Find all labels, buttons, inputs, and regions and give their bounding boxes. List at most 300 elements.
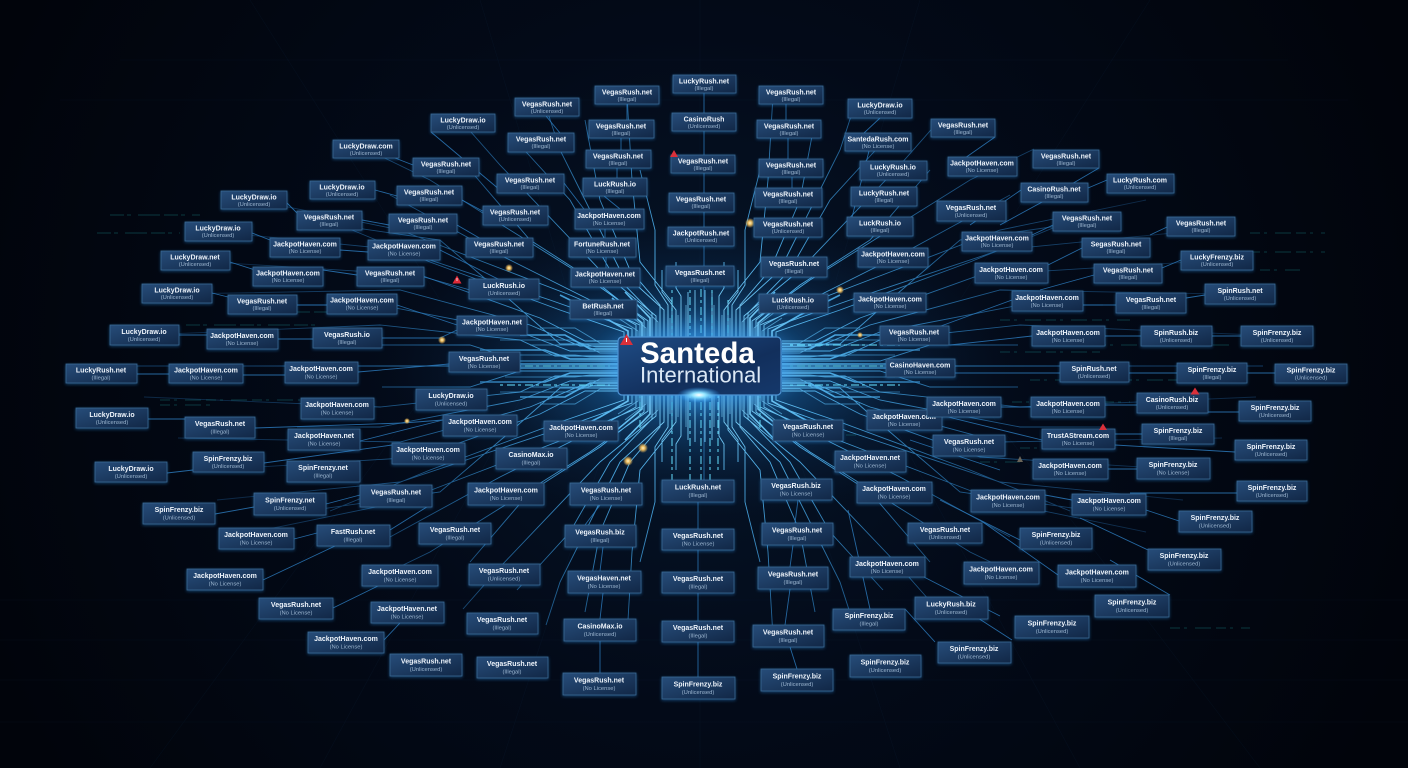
- node LuckyDraw.io: LuckyDraw.io: [857, 102, 903, 110]
- node LuckyDraw.net: [161, 251, 230, 270]
- node VegasRush.net: [595, 86, 659, 104]
- node VegasRush.net: [773, 420, 843, 441]
- node VegasRush.net: (Illegal): [608, 161, 628, 167]
- node JackpotHaven.com: JackpotHaven.com: [858, 296, 922, 304]
- node JackpotHaven.com: JackpotHaven.com: [256, 270, 320, 278]
- node VegasRush.net: [662, 621, 734, 642]
- node JackpotHaven.com: (No License): [995, 275, 1027, 281]
- node VegasRush.biz: [565, 525, 636, 547]
- node VegasRush.net: VegasRush.net: [946, 205, 997, 212]
- node SpinFrenzy.biz: (Illegal): [859, 622, 879, 628]
- node JackpotHaven.com: [207, 329, 278, 349]
- node VegasRush.net: VegasRush.net: [766, 162, 817, 170]
- node VegasRush.net: VegasRush.net: [490, 210, 541, 216]
- node VegasRush.net: VegasRush.net: [938, 122, 989, 130]
- node SpinFrenzy.biz: SpinFrenzy.biz: [1028, 620, 1077, 628]
- node CasinoHaven.com: (No License): [904, 370, 936, 376]
- node SpinFrenzy.biz: SpinFrenzy.biz: [950, 646, 999, 653]
- node VegasRush.net: (No License): [682, 542, 714, 548]
- node LuckyDraw.io: (Unlicensed): [115, 474, 147, 480]
- node VegasRush.net: [1094, 264, 1162, 283]
- node VegasRush.net: [297, 211, 362, 230]
- node JackpotHaven.com: (No License): [878, 494, 910, 500]
- node VegasRush.net: (Illegal): [419, 197, 439, 203]
- node VegasRush.net: (Unlicensed): [499, 217, 531, 223]
- node LuckyDraw.io: LuckyDraw.io: [440, 118, 486, 124]
- node JackpotHaven.com: [964, 562, 1039, 584]
- node JackpotHaven.com: [850, 557, 925, 577]
- node JackpotHaven.com: (No License): [346, 306, 378, 312]
- node VegasRush.net: VegasRush.net: [237, 298, 288, 306]
- node SpinFrenzy.biz: SpinFrenzy.biz: [845, 613, 894, 620]
- node JackpotHaven.com: JackpotHaven.com: [1015, 295, 1079, 302]
- node JackpotHaven.com: (No License): [593, 221, 625, 227]
- data particles: [97, 215, 1325, 628]
- node JackpotHaven.net: JackpotHaven.net: [377, 606, 438, 613]
- node VegasRush.net: VegasRush.net: [763, 630, 814, 636]
- node LuckyDraw.io: [221, 191, 287, 209]
- node VegasRush.net: (Illegal): [319, 222, 339, 228]
- node VegasRush.net: VegasRush.net: [678, 158, 729, 166]
- node VegasRush.net: (Illegal): [787, 536, 807, 542]
- node JackpotHaven.com: [187, 569, 263, 590]
- node VegasRush.net: [662, 572, 734, 593]
- node VegasRush.net: (Illegal): [688, 584, 708, 590]
- node SegasRush.net: (Illegal): [1106, 249, 1126, 255]
- node LuckyRush.net: [851, 187, 917, 206]
- node VegasRush.net: (Illegal): [778, 199, 798, 205]
- node VegasRush.net: [753, 625, 824, 647]
- node SpinFrenzy.biz: SpinFrenzy.biz: [1247, 444, 1296, 451]
- node VegasRush.net: VegasRush.net: [1103, 268, 1154, 274]
- node VegasRush.net: [570, 483, 642, 505]
- node SpinFrenzy.biz: (Unlicensed): [1295, 376, 1327, 382]
- node VegasRush.net: VegasRush.net: [581, 488, 632, 494]
- node SpinFrenzy.biz: SpinFrenzy.biz: [1191, 515, 1240, 522]
- node JackpotHaven.com: (No License): [565, 433, 597, 439]
- node VegasRush.net: VegasRush.net: [673, 625, 724, 632]
- node VegasRush.net: [497, 174, 564, 193]
- node JackpotHaven.com: JackpotHaven.com: [969, 566, 1033, 574]
- node SpinFrenzy.net: SpinFrenzy.net: [265, 498, 315, 504]
- node CasinoRush.net: [1021, 183, 1088, 202]
- node JackpotHaven.com: [854, 293, 926, 312]
- node FastRush.net: [317, 525, 390, 546]
- node VegasRush.net: (No License): [583, 686, 615, 692]
- node VegasRush.biz: VegasRush.biz: [771, 483, 821, 490]
- node VegasRush.net: [1167, 217, 1235, 236]
- node SpinFrenzy.biz: (Unlicensed): [1255, 452, 1287, 458]
- node VegasRush.net: (Illegal): [1141, 305, 1161, 311]
- node SpinFrenzy.biz: (Unlicensed): [1168, 562, 1200, 568]
- node CasinoRush.net: (Illegal): [1044, 194, 1064, 200]
- node VegasRush.net: VegasRush.net: [365, 270, 416, 278]
- node JackpotHaven.com: [867, 410, 942, 430]
- node SpinFrenzy.biz: (Unlicensed): [958, 654, 990, 660]
- node VegasRush.net: VegasRush.net: [593, 154, 644, 160]
- node JackpotRush.net: [668, 227, 734, 246]
- node JackpotHaven.net: JackpotHaven.net: [575, 272, 636, 278]
- node VegasRush.net: (Illegal): [953, 130, 973, 136]
- alert icon: [1190, 388, 1200, 394]
- node SegasRush.net: SegasRush.net: [1091, 242, 1142, 248]
- node SpinFrenzy.biz: [1015, 616, 1089, 638]
- node JackpotHaven.com: JackpotHaven.com: [396, 447, 460, 454]
- node LuckyDraw.io: (Unlicensed): [447, 125, 479, 131]
- node LuckyDraw.io: [416, 389, 487, 410]
- node JackpotHaven.com: JackpotHaven.com: [979, 267, 1043, 274]
- node VegasRush.net: (No License): [468, 364, 500, 370]
- node SpinRush.biz: (Unlicensed): [1160, 338, 1192, 344]
- node JackpotHaven.com: [468, 483, 544, 505]
- node VegasRush.net: VegasRush.net: [944, 439, 995, 446]
- node VegasRush.io: [313, 328, 382, 348]
- node LuckyRush.net: [673, 75, 736, 93]
- node JackpotHaven.com: [971, 490, 1045, 512]
- node LuckyRush.io: (Unlicensed): [877, 172, 909, 178]
- node SpinFrenzy.biz: [1239, 401, 1311, 421]
- node VegasRush.net: (No License): [590, 496, 622, 502]
- node VegasRush.net: (Illegal): [210, 430, 230, 436]
- node JackpotHaven.net: [835, 451, 906, 472]
- node VegasRush.net: (Illegal): [781, 97, 801, 103]
- node SpinFrenzy.biz: [1275, 364, 1347, 383]
- node SpinFrenzy.biz: [662, 677, 735, 699]
- node VegasRush.net: VegasRush.net: [769, 261, 820, 268]
- node FortuneRush.net: [569, 238, 636, 257]
- node LuckyRush.biz: (Unlicensed): [935, 610, 967, 616]
- node JackpotHaven.net: (No License): [476, 327, 508, 333]
- hub glow: [605, 326, 795, 406]
- node JackpotHaven.com: JackpotHaven.com: [305, 402, 369, 409]
- node JackpotHaven.com: JackpotHaven.com: [289, 366, 353, 373]
- node SpinFrenzy.biz: SpinFrenzy.biz: [1154, 428, 1203, 435]
- node SpinFrenzy.net: SpinFrenzy.net: [298, 465, 348, 472]
- node JackpotHaven.com: [327, 294, 397, 314]
- node BetRush.net: [570, 300, 637, 319]
- node JackpotHaven.com: [1012, 291, 1083, 311]
- node JackpotHaven.com: (No License): [384, 578, 416, 584]
- node VegasRush.net: VegasRush.net: [772, 528, 823, 534]
- node VegasRush.net: (Unlicensed): [929, 535, 961, 541]
- node LuckyRush.net: (Illegal): [91, 376, 111, 382]
- node VegasRush.net: VegasRush.net: [673, 533, 724, 540]
- node SpinRush.biz: [1141, 326, 1212, 346]
- node VegasRush.net: [931, 119, 995, 137]
- node JackpotHaven.com: (No License): [272, 278, 304, 284]
- node JackpotHaven.net: (No License): [589, 279, 621, 285]
- node JackpotHaven.com: (No License): [877, 259, 909, 265]
- node LuckyDraw.io: [95, 462, 167, 482]
- circuit traces: [137, 95, 1263, 637]
- node VegasRush.net: VegasRush.net: [522, 102, 573, 108]
- node SpinFrenzy.biz: (Unlicensed): [1256, 493, 1288, 499]
- node VegasRush.net: (No License): [953, 448, 985, 454]
- node VegasRush.net: [357, 267, 424, 286]
- node JackpotHaven.com: JackpotHaven.com: [872, 414, 936, 421]
- node SpinFrenzy.biz: SpinFrenzy.biz: [155, 507, 204, 514]
- node VegasRush.net: VegasRush.net: [477, 617, 528, 624]
- node SpinRush.net: (Unlicensed): [1224, 296, 1256, 302]
- node CasinoHaven.com: CasinoHaven.com: [890, 362, 950, 370]
- node JackpotHaven.com: (No License): [464, 428, 496, 434]
- node JackpotHaven.net: (No License): [391, 614, 423, 620]
- node JackpotHaven.com: [362, 565, 438, 586]
- node VegasRush.net: [757, 120, 821, 138]
- node JackpotHaven.com: [270, 238, 340, 257]
- node LuckyDraw.io: LuckyDraw.io: [89, 412, 135, 419]
- node SantedaRush.com: (No License): [862, 144, 894, 150]
- node SpinFrenzy.biz: SpinFrenzy.biz: [204, 456, 253, 463]
- node JackpotHaven.com: (No License): [874, 304, 906, 310]
- node VegasRush.net: [937, 201, 1006, 221]
- node SpinFrenzy.biz: [938, 642, 1011, 663]
- node JackpotHaven.com: JackpotHaven.com: [862, 486, 926, 493]
- node JackpotHaven.com: [1032, 326, 1105, 346]
- node LuckRush.io: [847, 217, 913, 236]
- node LuckyDraw.io: [310, 181, 375, 199]
- node JackpotHaven.com: (No License): [289, 249, 321, 255]
- node VegasRush.net: [755, 188, 822, 207]
- node JackpotHaven.com: JackpotHaven.com: [448, 419, 512, 426]
- node VegasRush.biz: [761, 479, 832, 500]
- node LuckyRush.com: (Unlicensed): [1124, 185, 1156, 191]
- node CasinoRush.biz: CasinoRush.biz: [1146, 397, 1199, 404]
- node SpinFrenzy.biz: (Unlicensed): [1036, 629, 1068, 635]
- node VegasRush.net: [508, 133, 574, 152]
- node JackpotHaven.net: [288, 429, 360, 450]
- node JackpotHaven.com: (No License): [948, 409, 980, 415]
- node VegasRush.net: (Illegal): [779, 131, 799, 137]
- node JackpotHaven.net: [571, 268, 640, 287]
- node VegasRush.net: (Unlicensed): [488, 576, 520, 582]
- node JackpotHaven.com: JackpotHaven.com: [549, 425, 613, 432]
- node JackpotHaven.com: [368, 240, 440, 260]
- node JackpotHaven.net: JackpotHaven.net: [840, 455, 901, 462]
- node JackpotHaven.com: JackpotHaven.com: [577, 213, 641, 220]
- node VegasRush.net: [469, 564, 540, 585]
- node CasinoMax.io: [564, 619, 636, 641]
- node SantedaRush.com: SantedaRush.com: [847, 136, 909, 144]
- node VegasRush.net: (Illegal): [1056, 161, 1076, 167]
- node JackpotHaven.com: [1033, 459, 1108, 479]
- node LuckyDraw.net: LuckyDraw.net: [170, 254, 220, 262]
- node JackpotHaven.com: [392, 443, 465, 464]
- node LuckRush.net: (Illegal): [688, 493, 708, 499]
- node LuckyDraw.io: [110, 325, 179, 345]
- node JackpotHaven.com: [544, 421, 618, 441]
- node VegasRush.biz: VegasRush.biz: [575, 530, 625, 536]
- node SpinFrenzy.biz: SpinFrenzy.biz: [1253, 330, 1302, 337]
- node VegasRush.io: (Illegal): [337, 340, 357, 346]
- node SpinFrenzy.biz: SpinFrenzy.biz: [1032, 532, 1081, 539]
- node VegasRush.net: [1116, 293, 1186, 313]
- node JackpotHaven.com: (No License): [966, 168, 998, 174]
- node VegasRush.net: [758, 567, 828, 589]
- node JackpotHaven.com: [962, 232, 1032, 251]
- node LuckyDraw.com: (Unlicensed): [350, 151, 382, 157]
- node JackpotHaven.com: [948, 157, 1017, 176]
- node SpinFrenzy.biz: SpinFrenzy.biz: [1251, 405, 1300, 412]
- node VegasHaven.net: (No License): [588, 584, 620, 590]
- node VegasRush.io: VegasRush.io: [324, 332, 370, 339]
- node JackpotHaven.com: JackpotHaven.com: [174, 368, 238, 374]
- node SpinFrenzy.biz: [1142, 424, 1214, 444]
- node LuckyDraw.io: LuckyDraw.io: [428, 393, 474, 400]
- node JackpotHaven.com: JackpotHaven.com: [368, 569, 432, 576]
- node VegasRush.net: [259, 598, 333, 619]
- node SpinFrenzy.net: (Illegal): [313, 474, 333, 480]
- node VegasRush.net: [759, 159, 823, 177]
- node SpinFrenzy.biz: (Unlicensed): [1116, 608, 1148, 614]
- node VegasRush.net: VegasRush.net: [596, 124, 647, 130]
- node JackpotHaven.com: JackpotHaven.com: [210, 333, 274, 340]
- node CasinoRush.biz: (Unlicensed): [1156, 405, 1188, 411]
- node SpinFrenzy.biz: [761, 669, 833, 691]
- node VegasRush.net: (Illegal): [502, 670, 522, 676]
- node JackpotHaven.com: [857, 482, 932, 503]
- node CasinoMax.io: (Unlicensed): [584, 632, 616, 638]
- node JackpotHaven.com: JackpotHaven.com: [1036, 401, 1100, 408]
- node VegasRush.net: (Illegal): [252, 306, 272, 312]
- node VegasRush.net: [228, 295, 297, 314]
- node JackpotHaven.com: (No License): [1081, 578, 1113, 584]
- node CasinoMax.io: (Illegal): [521, 460, 541, 466]
- node LuckyDraw.io: LuckyDraw.io: [108, 466, 154, 473]
- node JackpotHaven.com: (No License): [209, 582, 241, 588]
- node SpinFrenzy.biz: (Illegal): [1168, 436, 1188, 442]
- node JackpotHaven.com: JackpotHaven.com: [1077, 498, 1141, 505]
- node VegasRush.net: (Illegal): [1077, 223, 1097, 229]
- node JackpotHaven.net: [371, 602, 444, 623]
- node LuckyDraw.io: (Unlicensed): [161, 295, 193, 301]
- node SpinFrenzy.biz: [1179, 511, 1252, 532]
- node VegasRush.net: VegasRush.net: [516, 136, 567, 144]
- node SpinFrenzy.biz: SpinFrenzy.biz: [861, 660, 910, 666]
- node JackpotHaven.com: JackpotHaven.com: [1036, 330, 1100, 337]
- node SpinRush.net: [1205, 284, 1275, 304]
- node VegasRush.net: (Illegal): [693, 166, 713, 172]
- node SpinRush.net: [1060, 362, 1129, 382]
- node LuckyRush.net: (Illegal): [874, 198, 894, 204]
- node VegasRush.net: (Illegal): [380, 278, 400, 284]
- node VegasRush.net: [1053, 212, 1121, 231]
- node LuckyRush.net: (Illegal): [694, 86, 714, 92]
- node JackpotHaven.com: JackpotHaven.com: [372, 244, 436, 250]
- node LuckRush.net: LuckRush.net: [675, 484, 722, 492]
- node SpinFrenzy.biz: (Unlicensed): [682, 690, 714, 696]
- node VegasRush.net: (No License): [898, 337, 930, 343]
- node SpinFrenzy.biz: SpinFrenzy.biz: [773, 674, 822, 680]
- node LuckRush.io: (Illegal): [605, 189, 625, 195]
- node JackpotRush.net: (Unlicensed): [685, 238, 717, 244]
- node VegasRush.net: (Illegal): [617, 97, 637, 103]
- node LuckRush.io: LuckRush.io: [859, 220, 901, 228]
- node LuckyDraw.com: LuckyDraw.com: [339, 144, 393, 150]
- node LuckyFrenzy.biz: [1181, 251, 1253, 270]
- node JackpotHaven.com: [308, 632, 384, 653]
- node JackpotHaven.com: JackpotHaven.com: [855, 561, 919, 568]
- node LuckRush.io: (Unlicensed): [488, 291, 520, 297]
- node VegasRush.net: (Illegal): [611, 131, 631, 137]
- node JackpotHaven.com: JackpotHaven.com: [330, 298, 394, 304]
- node TrustAStream.com: TrustAStream.com: [1047, 433, 1109, 440]
- node CasinoRush.biz: [1137, 393, 1208, 413]
- domain nodes: [66, 75, 1347, 699]
- node JackpotHaven.net: (No License): [308, 442, 340, 448]
- node LuckyDraw.io: LuckyDraw.io: [121, 329, 167, 336]
- node VegasRush.net: [762, 523, 833, 545]
- node VegasRush.net: [515, 98, 579, 116]
- node VegasRush.net: [754, 218, 822, 237]
- node SpinFrenzy.biz: (Unlicensed): [1261, 338, 1293, 344]
- node BetRush.net: BetRush.net: [582, 304, 624, 310]
- node JackpotHaven.com: (No License): [992, 503, 1024, 509]
- node VegasRush.net: [185, 417, 255, 438]
- node VegasRush.net: VegasRush.net: [401, 658, 452, 666]
- node LuckyDraw.io: LuckyDraw.io: [319, 184, 365, 192]
- node VegasRush.net: [467, 613, 538, 634]
- node JackpotHaven.com: [443, 415, 517, 436]
- node VegasRush.net: VegasRush.net: [304, 214, 355, 222]
- node LuckRush.io: (Illegal): [870, 228, 890, 234]
- node TrustAStream.com: (No License): [1062, 441, 1094, 447]
- node VegasRush.net: (Illegal): [781, 170, 801, 176]
- hub: Santeda International: International: [640, 362, 761, 388]
- node JackpotHaven.com: JackpotHaven.com: [273, 242, 337, 248]
- node JackpotHaven.com: (No License): [981, 243, 1013, 249]
- node SpinFrenzy.biz: [833, 609, 905, 630]
- node VegasRush.net: (Illegal): [783, 580, 803, 586]
- node VegasRush.net: [1033, 150, 1099, 168]
- node VegasRush.net: (No License): [280, 610, 312, 616]
- node VegasRush.biz: (No License): [780, 492, 812, 498]
- node LuckyRush.biz: [915, 597, 988, 619]
- node CasinoRush.net: CasinoRush.net: [1027, 186, 1081, 194]
- node JackpotHaven.com: [975, 263, 1048, 283]
- central glow: [390, 218, 1010, 518]
- node LuckRush.io: LuckRush.io: [772, 298, 814, 304]
- node VegasRush.net: VegasRush.net: [676, 196, 727, 204]
- node LuckyDraw.io: (Unlicensed): [435, 402, 467, 408]
- node JackpotHaven.com: [1031, 397, 1105, 417]
- node LuckyRush.io: [860, 161, 927, 180]
- node FastRush.net: (Illegal): [343, 538, 363, 544]
- node FortuneRush.net: (No License): [586, 249, 618, 255]
- node VegasRush.net: VegasRush.net: [487, 661, 538, 668]
- node VegasRush.net: VegasRush.net: [195, 421, 246, 428]
- node LuckRush.io: LuckRush.io: [483, 283, 525, 290]
- sparkle lights: [404, 218, 863, 466]
- node VegasRush.net: VegasRush.net: [479, 568, 530, 575]
- node JackpotHaven.com: JackpotHaven.com: [474, 488, 538, 494]
- node LuckRush.io: LuckRush.io: [594, 182, 636, 188]
- node SpinFrenzy.biz: (Unlicensed): [1199, 524, 1231, 530]
- node LuckyRush.io: LuckyRush.io: [870, 164, 916, 172]
- node VegasRush.net: [413, 158, 479, 176]
- hub bottom light: [677, 387, 721, 403]
- node VegasRush.net: (Illegal): [1118, 275, 1138, 281]
- node LuckRush.net: [662, 480, 734, 502]
- node SantedaRush.com: [845, 133, 911, 151]
- hub: Santeda International: [618, 337, 781, 395]
- node SpinFrenzy.biz: (Unlicensed): [1259, 413, 1291, 419]
- node SpinFrenzy.net: [254, 493, 326, 515]
- node VegasRush.net: (Unlicensed): [531, 109, 563, 115]
- node VegasRush.net: (Illegal): [445, 536, 465, 542]
- node VegasRush.net: (Illegal): [489, 249, 509, 255]
- node CasinoMax.io: CasinoMax.io: [508, 452, 554, 459]
